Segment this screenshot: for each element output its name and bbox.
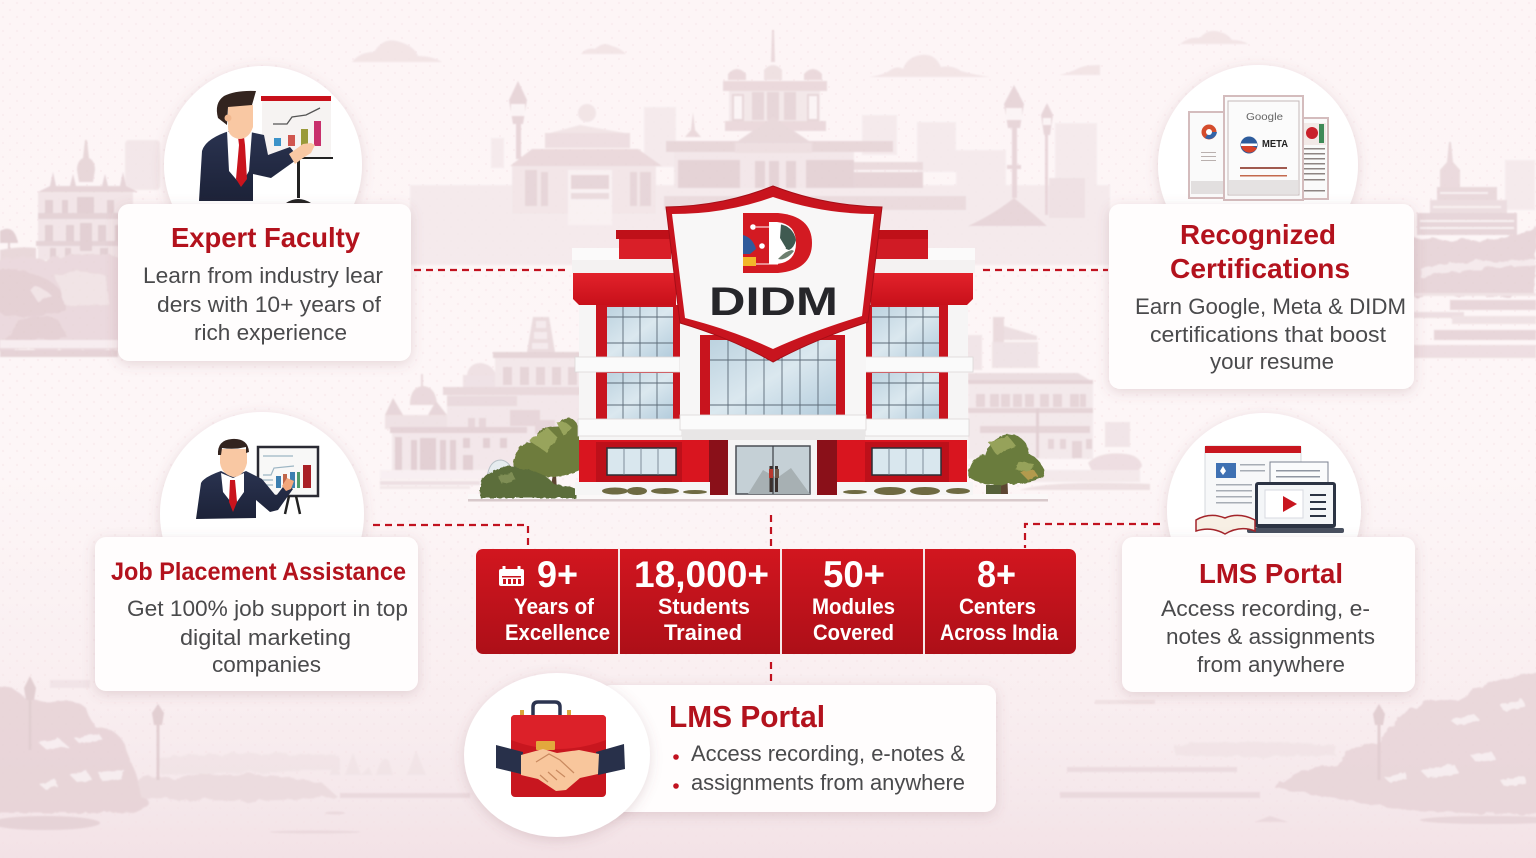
description (1135, 294, 1406, 374)
tree right (969, 434, 1045, 494)
shrubs (602, 487, 970, 495)
floor bands (575, 357, 680, 372)
description: Get 100% job support in top (127, 596, 408, 621)
tree masses bottom corners (0, 674, 1536, 814)
heading: Certifications (1170, 253, 1350, 284)
bottom card heading: LMS Portal (669, 699, 825, 734)
description: ders with 10+ years of (157, 292, 382, 317)
description (127, 596, 408, 677)
right pagoda (1417, 142, 1535, 235)
shield sign (666, 186, 882, 362)
icon circle: certifications (1158, 65, 1358, 265)
right vegetation (1412, 226, 1536, 296)
description: from anywhere (1197, 652, 1345, 677)
icon circle: LMS portal (1167, 413, 1361, 607)
heading: LMS Portal (1199, 558, 1343, 589)
stat: students (634, 554, 769, 645)
distant skyline band (410, 107, 1110, 265)
red bands (573, 273, 676, 305)
far horizon towers (160, 751, 426, 775)
palace top centre (664, 30, 966, 210)
stat: students: Students (658, 594, 750, 619)
connector lines (373, 270, 1160, 684)
bottom card bullets: Access recording, e-notes & (691, 741, 965, 766)
left palace (0, 140, 160, 262)
stat: modules: Covered (813, 620, 894, 645)
heading: Expert Faculty (171, 222, 360, 253)
ground strip (468, 498, 1048, 502)
tree left (479, 418, 580, 498)
ground streaks (0, 680, 1536, 834)
stat: students: Trained (664, 620, 742, 645)
description: Access recording, e- (1161, 596, 1370, 621)
white top bands (572, 259, 674, 273)
stat: centers: Across India (940, 620, 1059, 645)
google wordmark: Google (1246, 111, 1283, 123)
DIDM logo mark (743, 213, 812, 273)
stat: centers (940, 554, 1059, 645)
description: Learn from industry lear (143, 263, 383, 288)
icon: calendar (499, 566, 524, 586)
lamp posts and pavilion (509, 81, 1053, 226)
description (143, 263, 383, 345)
heading: Job Placement Assistance (111, 558, 406, 586)
lower left buildings (380, 317, 580, 489)
building rooftop left of centre (510, 104, 662, 225)
description: your resume (1210, 349, 1334, 374)
bottom card bullets (673, 741, 965, 795)
bottom card bullets: assignments from anywhere (691, 770, 965, 795)
wing walls (579, 305, 682, 440)
icon circle: job placement (160, 412, 364, 616)
card: expert faculty (118, 204, 411, 361)
roof blocks (619, 236, 671, 260)
stat: modules: 50+ (823, 554, 885, 595)
base (575, 482, 710, 495)
stats panel (476, 549, 1076, 654)
bottom card: LMS portal (600, 685, 996, 812)
stat: years: Years of (514, 594, 595, 619)
upper and lower windows left (596, 305, 680, 419)
left vegetation (0, 253, 125, 350)
description: companies (212, 652, 321, 677)
glass dome car (487, 460, 515, 478)
card: LMS portal right (1122, 537, 1415, 692)
stat: years: 9+ (537, 554, 578, 595)
stat: centers: 8+ (977, 554, 1016, 595)
description: digital marketing (180, 625, 351, 650)
card: job placement assistance (95, 537, 418, 691)
illustration: DIDM building (468, 186, 1048, 502)
description: certifications that boost (1150, 322, 1386, 347)
lamp posts bottom (24, 676, 1385, 780)
centre section (680, 320, 866, 420)
upper and lower windows right (866, 305, 948, 419)
description: rich experience (194, 320, 347, 345)
icon circle: expert faculty (164, 66, 362, 264)
description: notes & assignments (1166, 624, 1375, 649)
description: Earn Google, Meta & DIDM (1135, 294, 1406, 319)
stat: years (499, 554, 610, 645)
stat: students: 18,000+ (634, 554, 769, 595)
description (1161, 596, 1375, 677)
far-right block (1049, 178, 1085, 218)
clouds (352, 31, 1248, 77)
DIDM wordmark: DIDM (709, 280, 838, 324)
card: recognized certifications (1109, 204, 1414, 389)
stat: modules (812, 554, 895, 645)
heading: Recognized (1180, 219, 1336, 250)
stat: modules: Modules (812, 594, 895, 619)
meta wordmark: META (1262, 139, 1288, 150)
ground floor (579, 440, 682, 482)
icon circle: briefcase handshake (464, 673, 650, 837)
stat: centers: Centers (959, 594, 1036, 619)
lower right buildings (967, 317, 1150, 490)
heading (1170, 219, 1350, 284)
stat: years: Excellence (505, 620, 610, 645)
